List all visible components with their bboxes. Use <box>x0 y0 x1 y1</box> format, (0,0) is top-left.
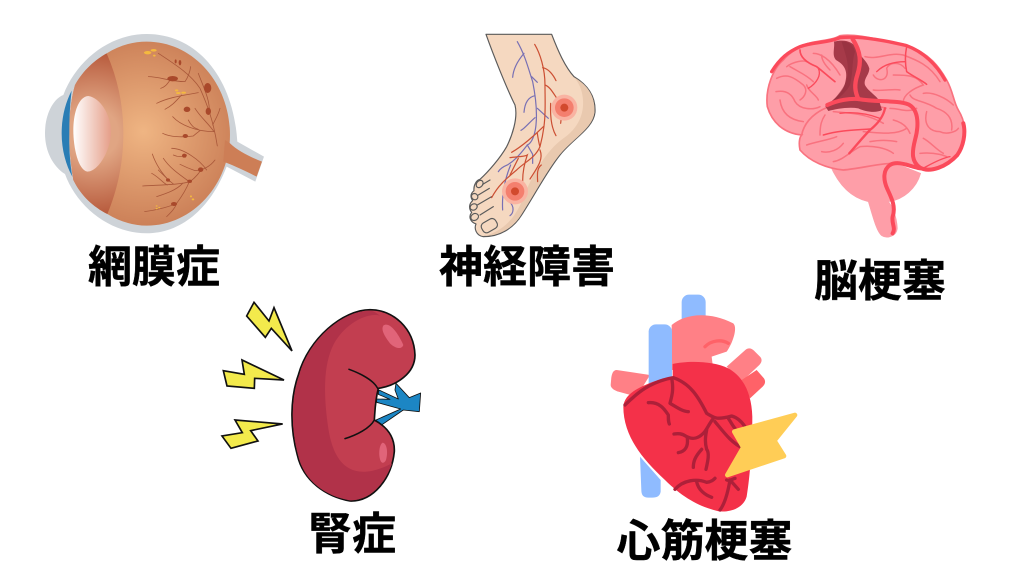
bolt top <box>247 302 292 351</box>
icon: brain with infarction <box>767 35 965 237</box>
label: retinopathy: 網膜症 <box>88 243 220 292</box>
label: neuropathy: 神経障害 <box>439 243 615 292</box>
label: cerebral infarction: 脳梗塞 <box>814 257 946 306</box>
icon: foot with neuropathy <box>469 34 595 237</box>
bolt middle <box>223 360 284 388</box>
label: nephropathy: 腎症 <box>308 510 396 559</box>
pain spot: heel <box>551 95 577 121</box>
icon: heart with lightning <box>611 295 795 512</box>
pain spot: toes <box>502 178 528 204</box>
label: myocardial infarction: 心筋梗塞 <box>616 517 792 566</box>
ureter <box>376 383 421 426</box>
bolt bottom <box>222 420 283 448</box>
icon: eye with retinopathy <box>45 34 264 233</box>
icon: kidney with pain bolts <box>222 302 421 501</box>
